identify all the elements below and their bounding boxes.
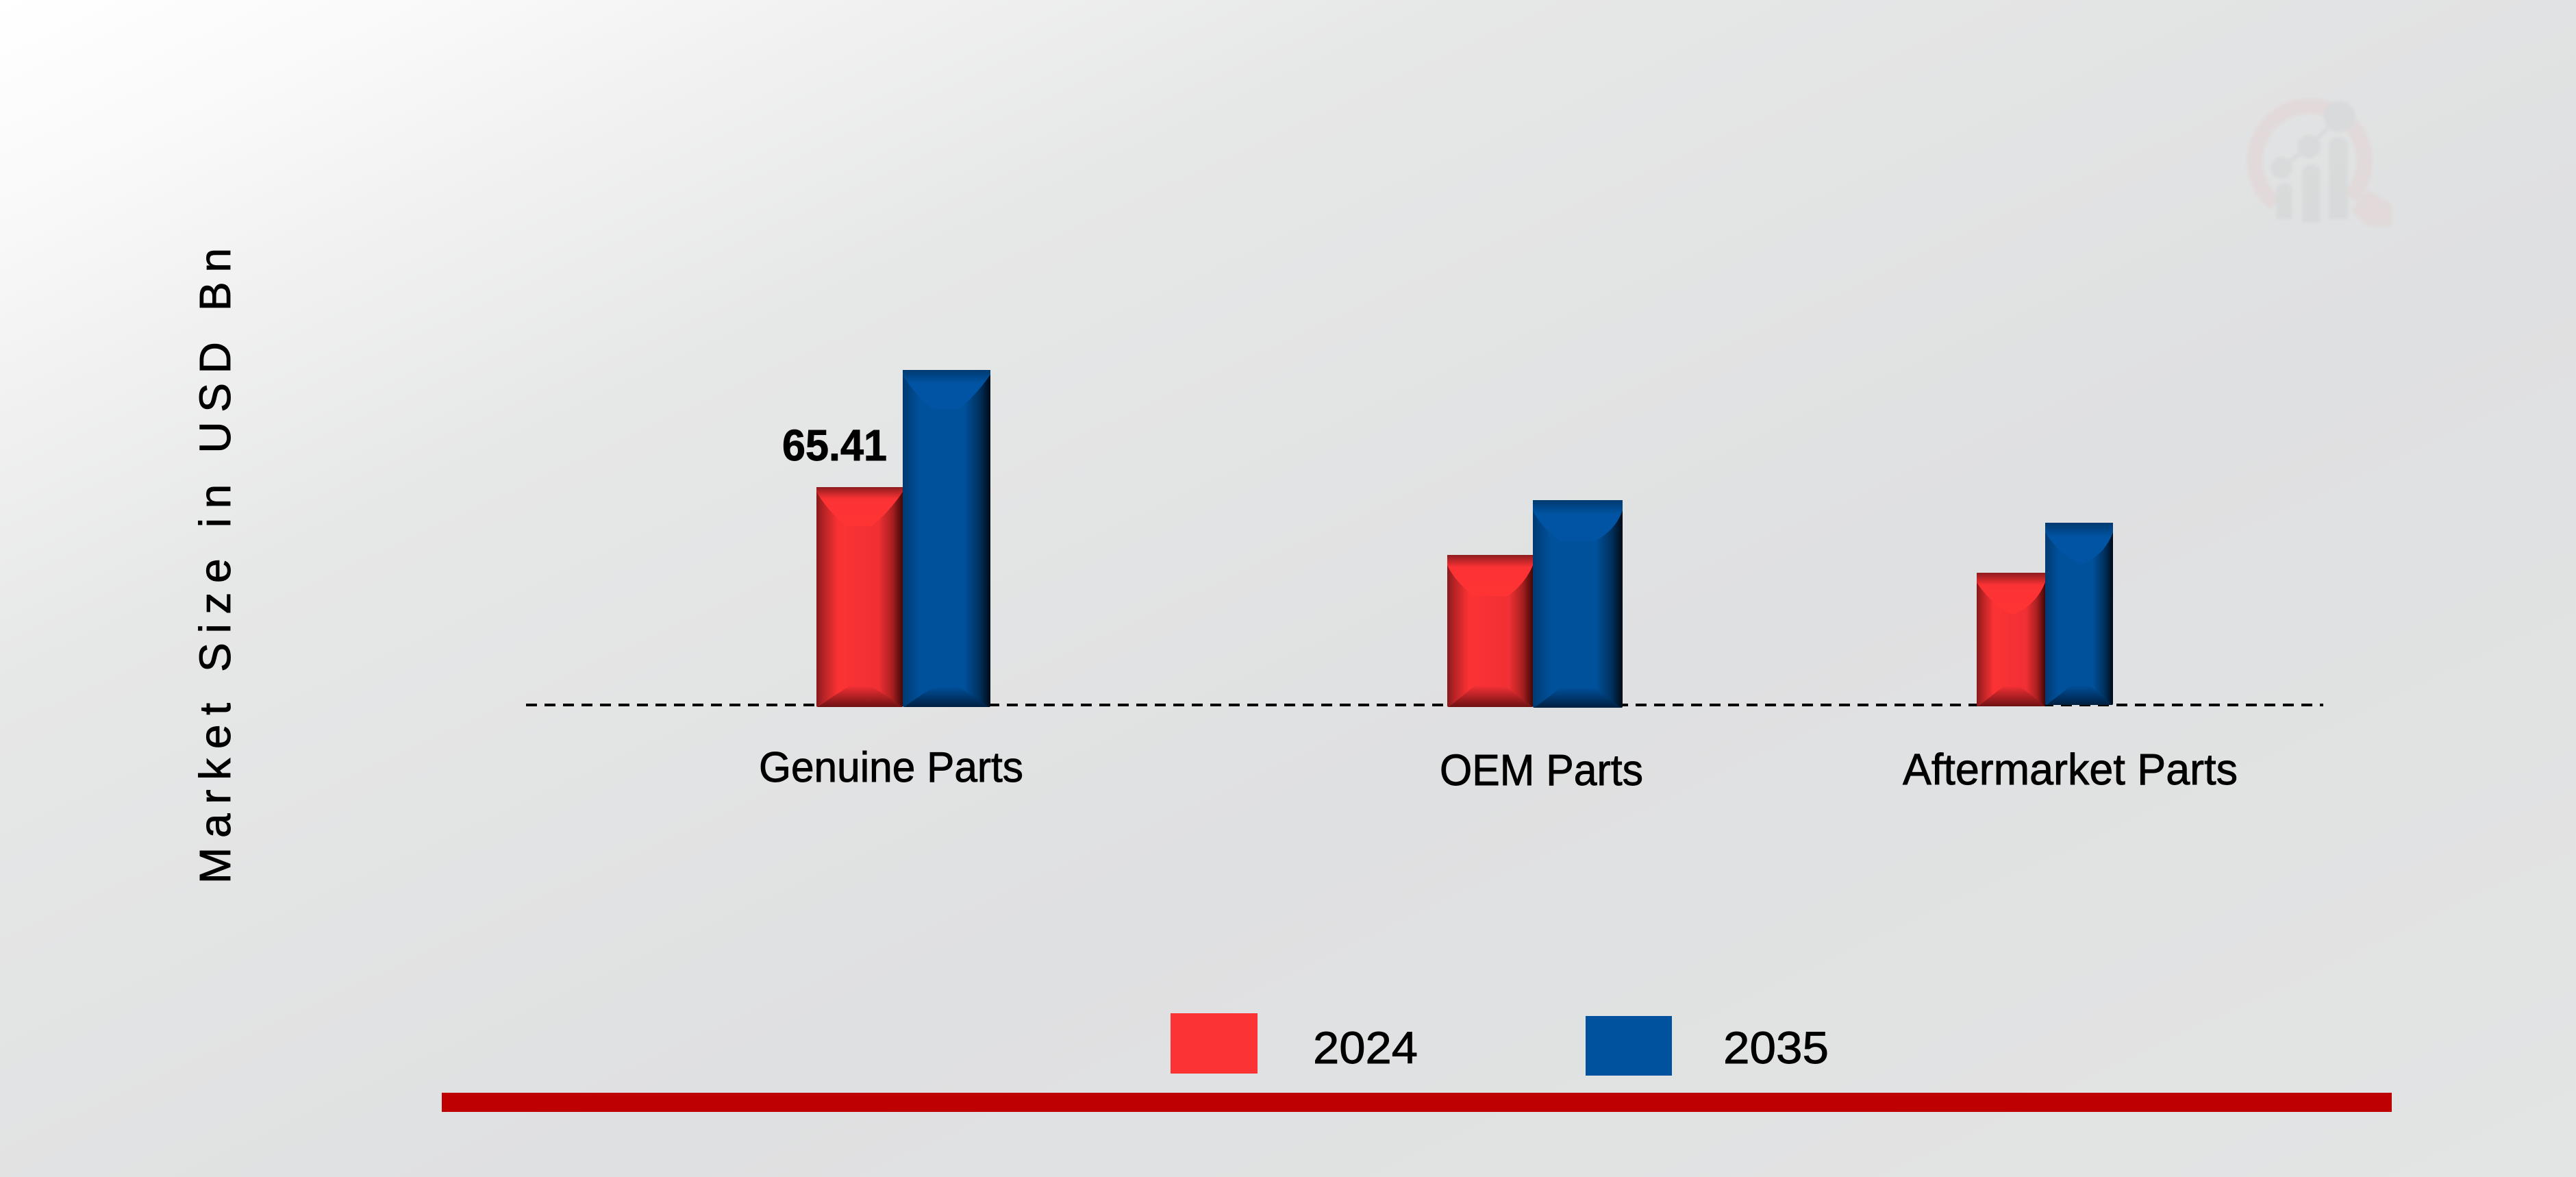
bar: OEM Parts 2024 xyxy=(1447,555,1533,707)
category label: OEM Parts: OEM Parts xyxy=(1440,745,1643,795)
bar: Aftermarket Parts 2035 xyxy=(2045,523,2113,705)
bar: Genuine Parts 2035 xyxy=(903,370,990,707)
category label: Aftermarket Parts: Aftermarket Parts xyxy=(1903,745,2238,794)
icon: watermark logo xyxy=(2255,101,2392,226)
category label: Genuine Parts: Genuine Parts xyxy=(759,744,1023,791)
legend xyxy=(1171,1013,1829,1076)
bar group: Aftermarket Parts xyxy=(1977,523,2113,706)
legend swatch: 2024 xyxy=(1171,1013,1258,1074)
baseline xyxy=(526,704,2323,706)
y-axis title: Market Size in USD Bn xyxy=(190,248,240,884)
bar group: OEM Parts xyxy=(1447,500,1623,708)
legend swatch: 2035 xyxy=(1586,1016,1672,1076)
bar group: Genuine Parts xyxy=(782,370,990,707)
data label: 65.41: 65.41 xyxy=(782,421,887,470)
footer rule xyxy=(442,1093,2392,1112)
legend label: 2024: 2024 xyxy=(1313,1022,1418,1073)
legend label: 2035: 2035 xyxy=(1723,1022,1829,1073)
bar: OEM Parts 2035 xyxy=(1533,500,1623,708)
bar: Genuine Parts 2024 xyxy=(816,487,903,707)
bar: Aftermarket Parts 2024 xyxy=(1977,573,2045,706)
